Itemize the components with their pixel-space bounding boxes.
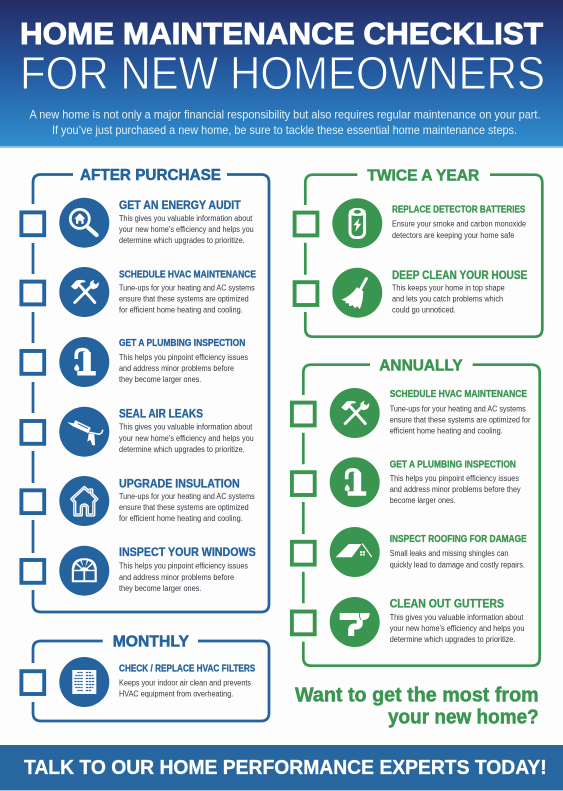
item: energy audit: determine which upgrades to prioritize.: [119, 236, 245, 245]
item: schedule hvac maintenance: [292, 388, 531, 438]
icon: caulk gun: [59, 407, 109, 457]
item: clean gutters: determine which upgrades to prioritize.: [390, 635, 515, 644]
item: deep clean: DEEP CLEAN YOUR HOUSE: [392, 270, 528, 282]
item: plumbing inspection: [292, 457, 521, 507]
item: detector batteries: Ensure your smoke and carbon monoxide: [392, 220, 526, 229]
item: energy audit: This gives you valuable information about: [119, 214, 253, 223]
item: plumbing inspection: and address minor problems before: [119, 364, 234, 373]
item: upgrade insulation: ensure that these systems are optimized: [119, 503, 249, 512]
item: detector batteries: REPLACE DETECTOR BATTERIES: [392, 205, 526, 216]
icon: air filter: [59, 657, 109, 707]
icon: battery: [332, 198, 382, 248]
item: upgrade insulation: [21, 476, 255, 526]
title: HOME MAINTENANCE CHECKLIST: [20, 17, 543, 51]
item: schedule hvac maintenance: Tune-ups for your heating and AC systems: [119, 283, 255, 292]
call to action question: [295, 685, 539, 729]
item: clean gutters: [292, 597, 524, 647]
item: seal air leaks: [21, 407, 254, 457]
item: inspect windows: INSPECT YOUR WINDOWS: [119, 547, 256, 559]
item: schedule hvac maintenance: SCHEDULE HVAC MAINTENANCE: [119, 269, 256, 280]
icon: broom: [332, 268, 382, 318]
item: detector batteries: detectors are keeping your home safe: [392, 231, 515, 240]
heading: annually: ANNUALLY: [379, 357, 463, 374]
item: inspect windows: This helps you pinpoint efficiency issues: [119, 562, 248, 571]
item: plumbing inspection: This helps you pinpoint efficiency issues: [119, 353, 248, 362]
item: seal air leaks: your new home’s efficiency and helps you: [119, 434, 254, 443]
item: schedule hvac maintenance: ensure that these systems are optimized for: [390, 415, 531, 424]
item: schedule hvac maintenance: [21, 267, 256, 317]
item: plumbing inspection: become larger ones.: [390, 496, 456, 505]
intro text: If you’ve just purchased a new home, be sure to tackle these essential home maintenance steps.: [52, 123, 517, 137]
item: plumbing inspection: [21, 337, 248, 387]
item: detector batteries: [295, 198, 526, 248]
heading: monthly: MONTHLY: [113, 634, 189, 650]
item: deep clean: [295, 268, 528, 318]
item: plumbing inspection: GET A PLUMBING INSPECTION: [119, 338, 245, 349]
intro text: [30, 108, 540, 137]
item: hvac filters: HVAC equipment from overheating.: [119, 689, 233, 698]
icon: insulated house: [59, 476, 109, 526]
item: plumbing inspection: and address minor problems before they: [390, 485, 521, 494]
header banner: [0, 0, 563, 148]
item: schedule hvac maintenance: efficient home heating and cooling.: [390, 426, 503, 435]
item: upgrade insulation: UPGRADE INSULATION: [119, 479, 240, 491]
icon: gutter: [330, 597, 380, 647]
item: deep clean: This keeps your home in top shape: [392, 284, 505, 293]
icon: magnifying glass with house: [59, 198, 109, 248]
item: clean gutters: CLEAN OUT GUTTERS: [390, 599, 504, 611]
panel: after purchase: [21, 167, 269, 612]
item: energy audit: GET AN ENERGY AUDIT: [119, 200, 241, 212]
item: clean gutters: This gives you valuable information about: [390, 613, 524, 622]
item: plumbing inspection: This helps you pinpoint efficiency issues: [390, 474, 519, 483]
call to action question: your new home?: [388, 707, 539, 729]
item: plumbing inspection: GET A PLUMBING INSPECTION: [390, 459, 516, 470]
icon: faucet with drop: [59, 337, 109, 387]
item: inspect windows: [21, 546, 256, 596]
item: inspect roofing: INSPECT ROOFING FOR DAMAGE: [390, 534, 527, 545]
title: [20, 17, 545, 99]
footer banner: TALK TO OUR HOME PERFORMANCE EXPERTS TODAY!: [24, 757, 547, 779]
icon: hammer and wrench: [59, 267, 109, 317]
panel: twice a year: [295, 168, 542, 337]
heading: after purchase: AFTER PURCHASE: [80, 167, 221, 184]
item: seal air leaks: This gives you valuable information about: [119, 423, 253, 432]
item: schedule hvac maintenance: SCHEDULE HVAC MAINTENANCE: [390, 389, 527, 400]
item: deep clean: could go unnoticed.: [392, 306, 456, 315]
item: clean gutters: your new home’s efficiency and helps you: [390, 624, 524, 633]
item: schedule hvac maintenance: ensure that these systems are optimized: [119, 294, 249, 303]
item: deep clean: and lets you catch problems which: [392, 295, 503, 304]
item: hvac filters: CHECK / REPLACE HVAC FILTERS: [119, 664, 256, 675]
item: hvac filters: [21, 657, 256, 707]
item: upgrade insulation: for efficient home heating and cooling.: [119, 514, 243, 523]
item: hvac filters: Keeps your indoor air clean and prevents: [119, 678, 251, 687]
call to action question: Want to get the most from: [295, 685, 539, 707]
item: seal air leaks: SEAL AIR LEAKS: [119, 408, 203, 420]
item: inspect roofing: Small leaks and missing shingles can: [390, 549, 508, 558]
footer banner: [0, 745, 563, 791]
heading: twice a year: TWICE A YEAR: [367, 168, 480, 185]
icon: hammer and wrench: [330, 388, 380, 438]
item: inspect roofing: [292, 527, 527, 577]
item: plumbing inspection: they become larger ones.: [119, 375, 201, 384]
item: inspect windows: and address minor problems before: [119, 573, 234, 582]
item: upgrade insulation: Tune-ups for your heating and AC systems: [119, 492, 255, 501]
item: inspect roofing: quickly lead to damage and costly repairs.: [390, 560, 525, 569]
item: energy audit: your new home’s efficiency and helps you: [119, 225, 254, 234]
icon: roof: [330, 527, 380, 577]
icon: faucet with drop: [330, 457, 380, 507]
panel: monthly: [21, 634, 269, 721]
item: seal air leaks: determine which upgrades to prioritize.: [119, 445, 245, 454]
icon: arched window: [59, 546, 109, 596]
item: schedule hvac maintenance: Tune-ups for your heating and AC systems: [390, 404, 526, 413]
item: energy audit: [21, 198, 254, 248]
panel: annually: [292, 357, 540, 666]
item: schedule hvac maintenance: for efficient home heating and cooling.: [119, 305, 243, 314]
item: inspect windows: they become larger ones.: [119, 584, 201, 593]
